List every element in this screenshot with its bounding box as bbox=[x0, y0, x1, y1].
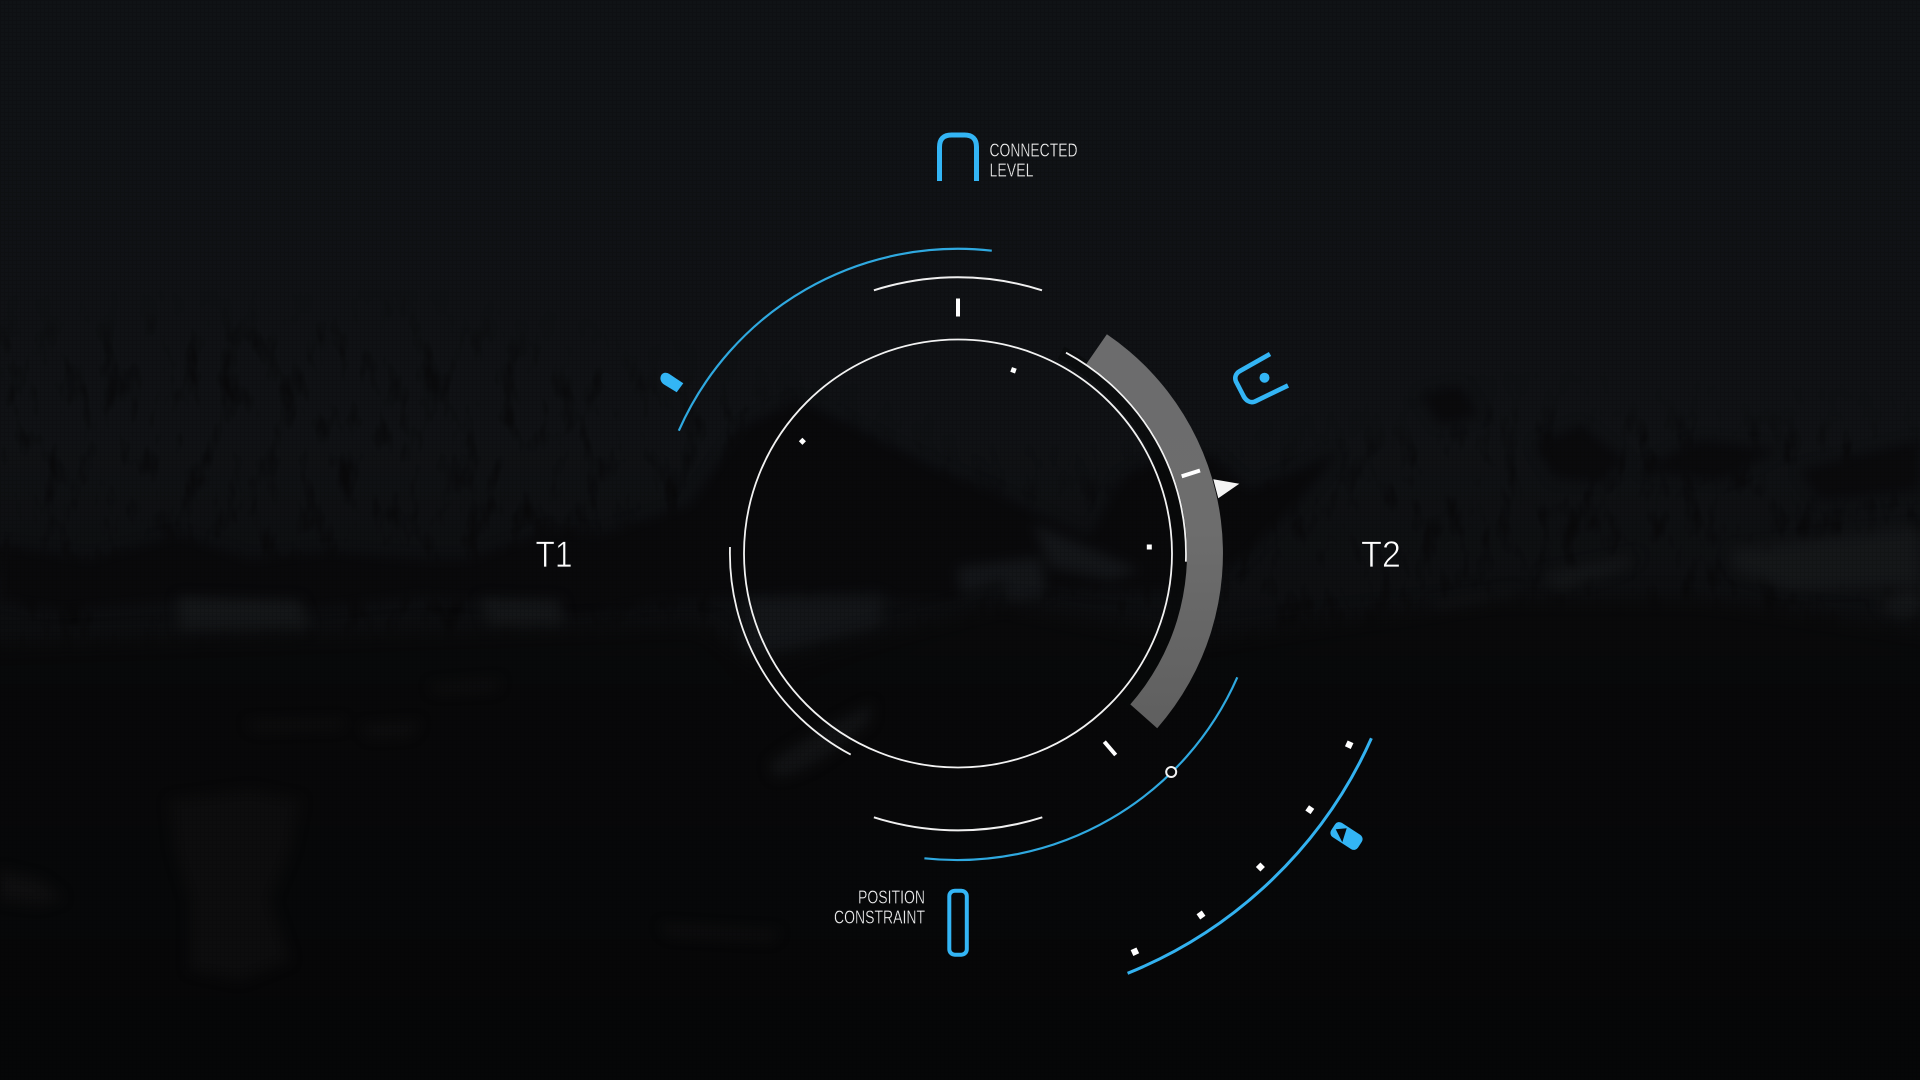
icon: position constraint bbox=[949, 891, 967, 955]
top white arc bbox=[874, 277, 1042, 290]
dial bbox=[679, 249, 1371, 973]
pointer triangle bbox=[1213, 479, 1239, 498]
main circle bbox=[744, 340, 1172, 768]
tick top bbox=[956, 298, 960, 316]
tick on grey band bbox=[1182, 470, 1200, 476]
icon: connected level bbox=[940, 135, 976, 181]
label: T2: T2 bbox=[1361, 534, 1401, 575]
inner thin arc left bbox=[730, 547, 851, 755]
ring marker on blue arc bbox=[1166, 767, 1176, 777]
icon: bracket with dot bbox=[1235, 354, 1288, 402]
inner thin arc right bbox=[1066, 353, 1186, 562]
label: position constraint: CONSTRAINT bbox=[834, 908, 925, 928]
background: dark mountain landscape bbox=[0, 0, 1920, 771]
bottom white arc bbox=[874, 817, 1042, 830]
label: connected level: LEVEL bbox=[990, 160, 1034, 180]
outer arc dots bbox=[1131, 740, 1353, 956]
grey gauge band bbox=[1086, 334, 1223, 728]
label: T1: T1 bbox=[536, 534, 572, 575]
dark gap behind grey band bbox=[1061, 353, 1181, 704]
label: position constraint bbox=[834, 888, 925, 928]
blue arc lower right bbox=[924, 677, 1237, 860]
icon: blue capsule with triangle bbox=[1328, 820, 1365, 852]
label: connected level bbox=[990, 140, 1078, 180]
label: connected level: CONNECTED bbox=[990, 140, 1078, 160]
blue arc upper left bbox=[679, 249, 992, 431]
label: position constraint: POSITION bbox=[858, 888, 925, 908]
inner ring dots bbox=[799, 367, 1152, 550]
outer blue arc bbox=[1128, 738, 1371, 973]
tick lower right bbox=[1104, 742, 1116, 755]
icon: blue tab upper left bbox=[660, 373, 683, 392]
